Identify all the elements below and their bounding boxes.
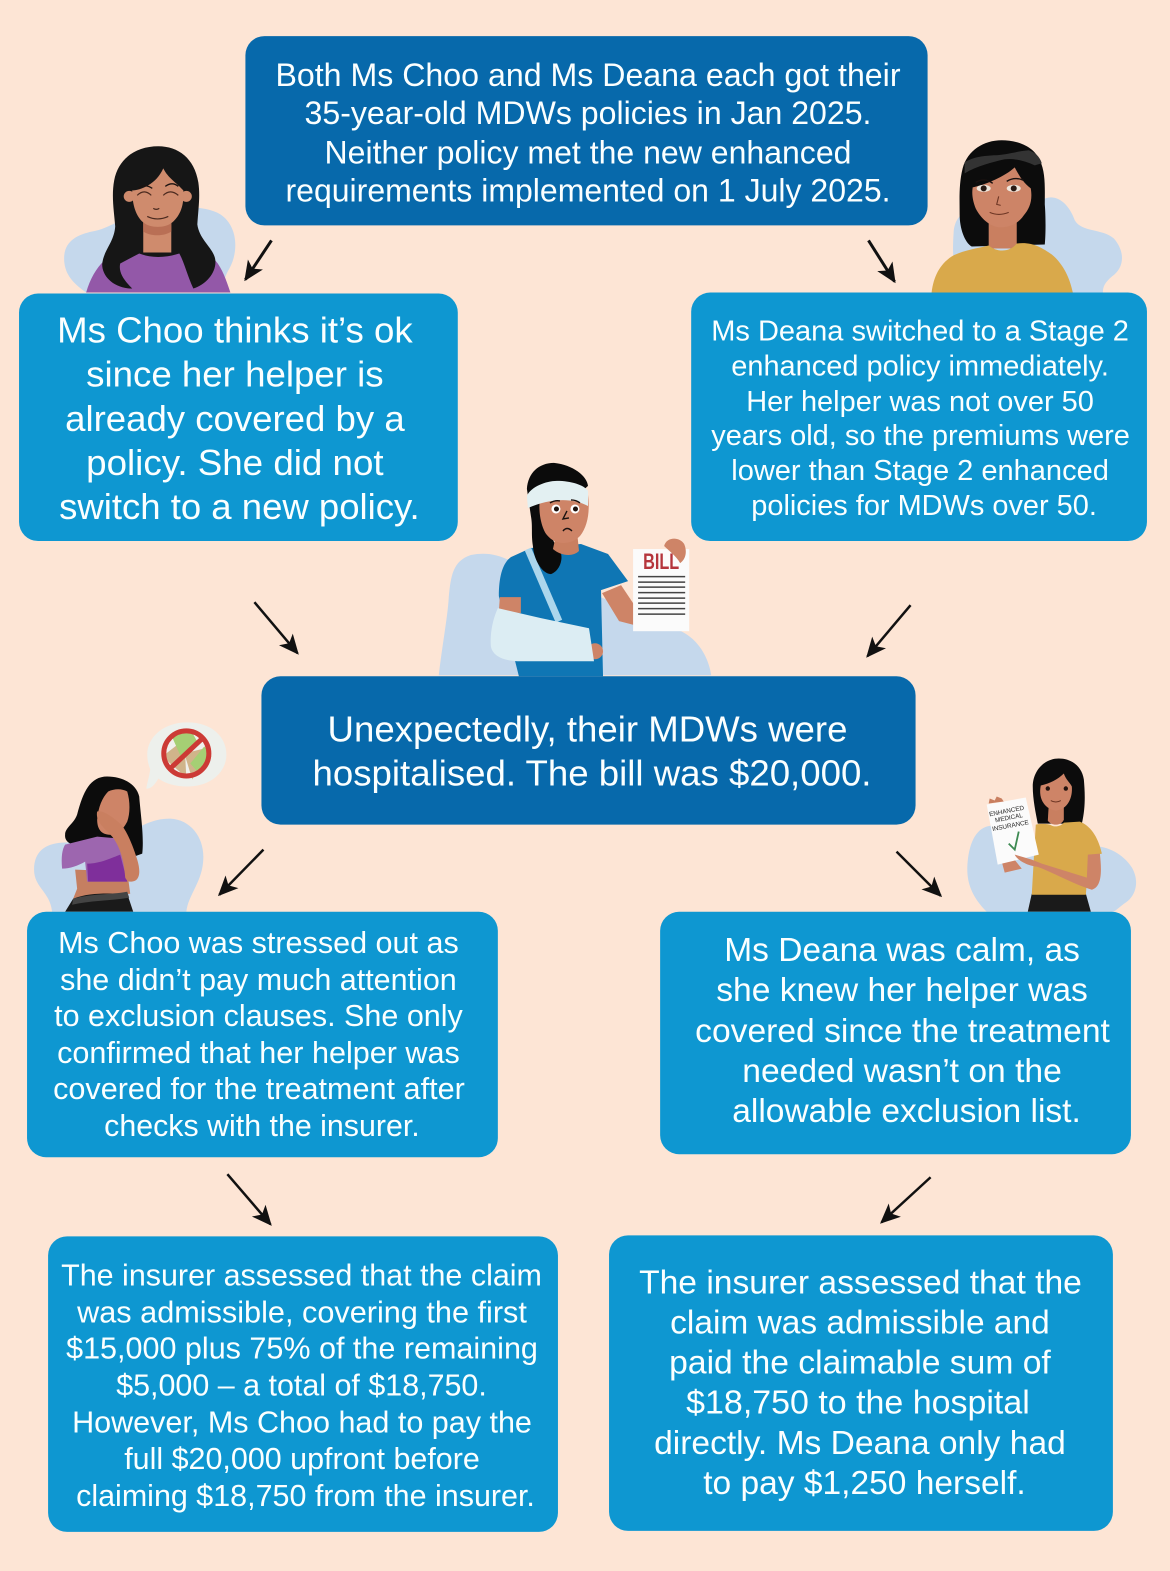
text: Ms Choo decision: switch to a new policy. <box>59 486 420 527</box>
panel: Ms Choo stressed <box>27 912 498 1157</box>
arrow: Ms Deana to hospital <box>867 605 911 656</box>
text: Ms Choo outcome: claiming $18,750 from the insurer. <box>76 1479 535 1513</box>
text: hospital bill: Unexpectedly, their MDWs were <box>328 708 847 749</box>
panel: hospitalised <box>261 676 916 825</box>
text: Ms Deana decision: Ms Deana switched to a Stage 2 <box>711 316 1129 348</box>
text: Ms Choo decision: since her helper is <box>86 354 384 395</box>
panel: Ms Choo claim outcome <box>48 1236 558 1532</box>
text: Ms Choo outcome: However, Ms Choo had to pay the <box>72 1406 532 1440</box>
insurance document: INSURANCE <box>992 819 1029 833</box>
panel: both policies intro <box>245 36 928 225</box>
text: intro: Neither policy met the new enhanced <box>325 134 851 170</box>
illustration: Ms Choo smiling <box>64 146 235 293</box>
bill document <box>633 539 689 631</box>
text: Ms Deana decision: policies for MDWs over 50. <box>751 490 1097 522</box>
insurance document <box>987 797 1039 865</box>
arrow: Ms Deana to outcome <box>882 1177 931 1222</box>
text: hospital bill: hospitalised. The bill was $20,000. <box>313 752 871 794</box>
illustration: injured helper holding a bill <box>439 463 711 676</box>
arrow: Ms Choo to hospital <box>254 602 298 653</box>
speech bubble with crossed-out money <box>146 722 226 789</box>
text: Ms Choo decision: policy. She did not <box>86 442 384 483</box>
panel: Ms Deana switched <box>691 293 1147 541</box>
illustration: Ms Deana smiling <box>932 140 1122 293</box>
text: Ms Deana reaction: needed wasn’t on the <box>742 1053 1062 1090</box>
text: Ms Choo reaction: Ms Choo was stressed out as <box>58 927 459 960</box>
text: Ms Choo decision <box>57 310 420 527</box>
illustration: Ms Choo stressed <box>34 722 226 912</box>
bill document: BILL <box>643 549 679 574</box>
text: Ms Deana outcome: The insurer assessed that the <box>639 1264 1082 1301</box>
text: Ms Deana outcome: claim was admissible and <box>670 1305 1050 1342</box>
text: Ms Choo outcome: was admissible, covering the first <box>76 1296 527 1330</box>
text: Ms Choo reaction <box>53 927 465 1143</box>
text: Ms Choo reaction: she didn’t pay much attention <box>60 964 457 997</box>
text: Ms Deana decision: lower than Stage 2 enhanced <box>731 455 1109 487</box>
text: Ms Deana outcome <box>639 1264 1082 1502</box>
panel: Ms Deana calm <box>660 912 1131 1154</box>
arrow: Ms Choo to outcome <box>227 1174 270 1224</box>
text: intro: requirements implemented on 1 July 2025. <box>285 172 891 208</box>
text: Ms Choo outcome <box>61 1258 542 1513</box>
arrow: hospital to Ms Choo <box>219 850 263 895</box>
insurance document: ENHANCED <box>989 805 1025 818</box>
text: Ms Choo outcome: $15,000 plus 75% of the remaining <box>66 1332 538 1366</box>
text: hospital bill <box>313 708 871 794</box>
text: Ms Choo reaction: checks with the insurer. <box>104 1110 420 1143</box>
arrow: intro to Ms Deana <box>868 240 895 282</box>
text: intro: 35-year-old MDWs policies in Jan 2025. <box>305 95 871 131</box>
text: Ms Deana reaction: Ms Deana was calm, as <box>724 932 1080 969</box>
text: Ms Choo decision: already covered by a <box>65 398 405 439</box>
text: Ms Deana decision: years old, so the premiums were <box>711 420 1130 452</box>
text: intro: Both Ms Choo and Ms Deana each got their <box>275 57 901 93</box>
text: Ms Choo decision: Ms Choo thinks it’s ok <box>57 310 413 351</box>
text: Ms Deana decision: Her helper was not over 50 <box>746 386 1094 418</box>
text: Ms Deana outcome: directly. Ms Deana only had <box>654 1425 1066 1462</box>
text: Ms Deana reaction: allowable exclusion list. <box>732 1093 1081 1130</box>
text: Ms Choo reaction: to exclusion clauses. She only <box>54 1000 464 1033</box>
text: Ms Deana reaction <box>695 932 1111 1130</box>
panel: Ms Deana claim outcome <box>609 1235 1113 1531</box>
text: Ms Deana reaction: she knew her helper was <box>716 972 1088 1009</box>
text: Ms Deana outcome: $18,750 to the hospital <box>686 1385 1030 1422</box>
insurance document: MEDICAL <box>995 812 1024 824</box>
text: Ms Choo reaction: confirmed that her helper was <box>57 1037 460 1070</box>
text: Ms Choo outcome: full $20,000 upfront before <box>124 1442 480 1476</box>
text: Ms Deana decision: enhanced policy immediately. <box>731 351 1109 383</box>
text: Ms Deana outcome: to pay $1,250 herself. <box>703 1465 1026 1502</box>
panel: Ms Choo did not switch <box>19 294 458 541</box>
text: intro <box>275 57 901 208</box>
text: Ms Deana decision <box>711 316 1130 522</box>
illustration: Ms Deana holding enhanced medical insurance <box>967 758 1136 912</box>
arrow: intro to Ms Choo <box>245 240 271 280</box>
text: Ms Deana outcome: paid the claimable sum of <box>669 1345 1051 1382</box>
text: Ms Choo outcome: The insurer assessed that the claim <box>61 1258 542 1292</box>
text: Ms Choo reaction: covered for the treatment after <box>53 1073 465 1106</box>
text: Ms Deana reaction: covered since the treatment <box>695 1013 1111 1050</box>
arrow: hospital to Ms Deana <box>897 852 941 896</box>
text: Ms Choo outcome: $5,000 – a total of $18,750. <box>116 1369 487 1403</box>
